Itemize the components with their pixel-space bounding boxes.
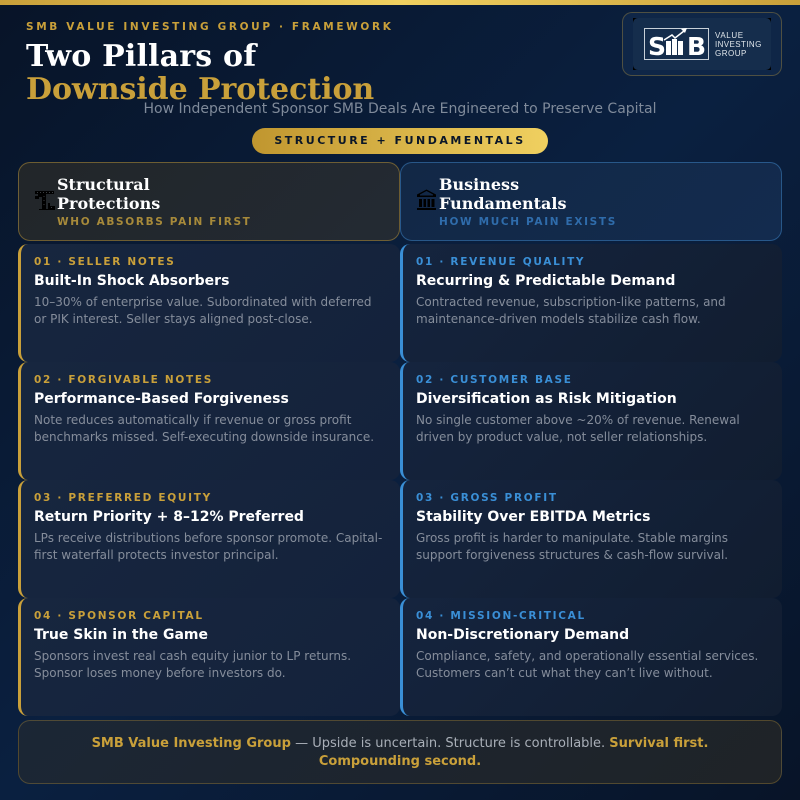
footer callout <box>18 720 782 784</box>
logo badge: INVESTING <box>715 40 762 49</box>
icon: crane <box>35 191 55 210</box>
footer callout: SMB Value Investing Group — Upside is uncertain. Structure is controllable. Survival first. <box>92 736 708 751</box>
card: gross profit <box>400 480 782 598</box>
title: Downside Protection <box>26 72 374 107</box>
title: Two Pillars of <box>26 39 256 74</box>
card: forgivable notes <box>18 362 400 480</box>
logo badge: S <box>648 32 666 61</box>
card: gross profit: 03 · GROSS PROFIT <box>416 492 558 504</box>
card: revenue quality: Recurring & Predictable Demand <box>416 273 675 289</box>
panel header: business fundamentals: Fundamentals <box>439 194 566 213</box>
card: seller notes <box>18 244 400 362</box>
footer callout: Compounding second. <box>319 754 481 769</box>
card: sponsor capital: Sponsors invest real cash equity junior to LP returns. <box>34 649 351 663</box>
pill badge: STRUCTURE + FUNDAMENTALS <box>274 134 526 147</box>
logo badge: VALUE <box>715 31 744 40</box>
top gold bar <box>0 0 800 5</box>
card: sponsor capital: True Skin in the Game <box>34 627 208 643</box>
card: customer base: 02 · CUSTOMER BASE <box>416 374 573 386</box>
pill badge <box>252 128 548 154</box>
card: seller notes: Built-In Shock Absorbers <box>34 273 229 289</box>
card: mission-critical: 04 · MISSION-CRITICAL <box>416 610 586 622</box>
card: gross profit: Gross profit is harder to manipulate. Stable margins <box>416 531 728 545</box>
logo badge: GROUP <box>715 49 747 58</box>
panel header: structural protections: Protections <box>57 194 160 213</box>
card: forgivable notes: Performance-Based Forgiveness <box>34 391 289 407</box>
card: preferred equity: first waterfall protects investor principal. <box>34 548 279 562</box>
card: revenue quality <box>400 244 782 362</box>
card: seller notes: or PIK interest. Seller stays aligned post-close. <box>34 312 313 326</box>
icon: classical building <box>417 190 436 210</box>
card: mission-critical: Customers can’t cut what they can’t live without. <box>416 666 713 680</box>
card: preferred equity: 03 · PREFERRED EQUITY <box>34 492 212 504</box>
card: sponsor capital: 04 · SPONSOR CAPITAL <box>34 610 204 622</box>
card: seller notes: 01 · SELLER NOTES <box>34 256 175 268</box>
card: preferred equity: LPs receive distributions before sponsor promote. Capital- <box>34 531 382 545</box>
card: forgivable notes: 02 · FORGIVABLE NOTES <box>34 374 213 386</box>
card: revenue quality: maintenance-driven models stabilize cash flow. <box>416 312 701 326</box>
card: revenue quality: Contracted revenue, subscription-like patterns, and <box>416 295 726 309</box>
card: customer base <box>400 362 782 480</box>
card: customer base: No single customer above ~20% of revenue. Renewal <box>416 413 740 427</box>
card: gross profit: support forgiveness structures & cash-flow survival. <box>416 548 728 562</box>
card: mission-critical <box>400 598 782 716</box>
card: customer base: Diversification as Risk Mitigation <box>416 391 677 407</box>
panel header: structural protections <box>18 162 400 241</box>
eyebrow label: SMB VALUE INVESTING GROUP · FRAMEWORK <box>26 21 394 33</box>
card: preferred equity: Return Priority + 8–12% Preferred <box>34 509 304 525</box>
card: forgivable notes: benchmarks missed. Self-executing downside insurance. <box>34 430 374 444</box>
card: sponsor capital: Sponsor loses money before investors do. <box>34 666 286 680</box>
logo badge <box>622 12 782 76</box>
subtitle: How Independent Sponsor SMB Deals Are Engineered to Preserve Capital <box>143 101 657 117</box>
card: forgivable notes: Note reduces automatically if revenue or gross profit <box>34 413 351 427</box>
panel header: business fundamentals: HOW MUCH PAIN EXISTS <box>439 216 617 228</box>
panel header: structural protections: Structural <box>57 175 150 194</box>
panel header: business fundamentals: Business <box>439 175 519 194</box>
card: preferred equity <box>18 480 400 598</box>
card: mission-critical: Non-Discretionary Demand <box>416 627 629 643</box>
card: customer base: driven by product value, not seller relationships. <box>416 430 707 444</box>
panel header: structural protections: WHO ABSORBS PAIN FIRST <box>57 216 252 228</box>
panel header: business fundamentals <box>400 162 782 241</box>
card: mission-critical: Compliance, safety, and operationally essential services. <box>416 649 758 663</box>
card: sponsor capital <box>18 598 400 716</box>
card: revenue quality: 01 · REVENUE QUALITY <box>416 256 585 268</box>
logo badge: B <box>687 32 706 61</box>
card: seller notes: 10–30% of enterprise value. Subordinated with deferred <box>34 295 372 309</box>
card: gross profit: Stability Over EBITDA Metrics <box>416 509 650 525</box>
title <box>26 39 374 107</box>
